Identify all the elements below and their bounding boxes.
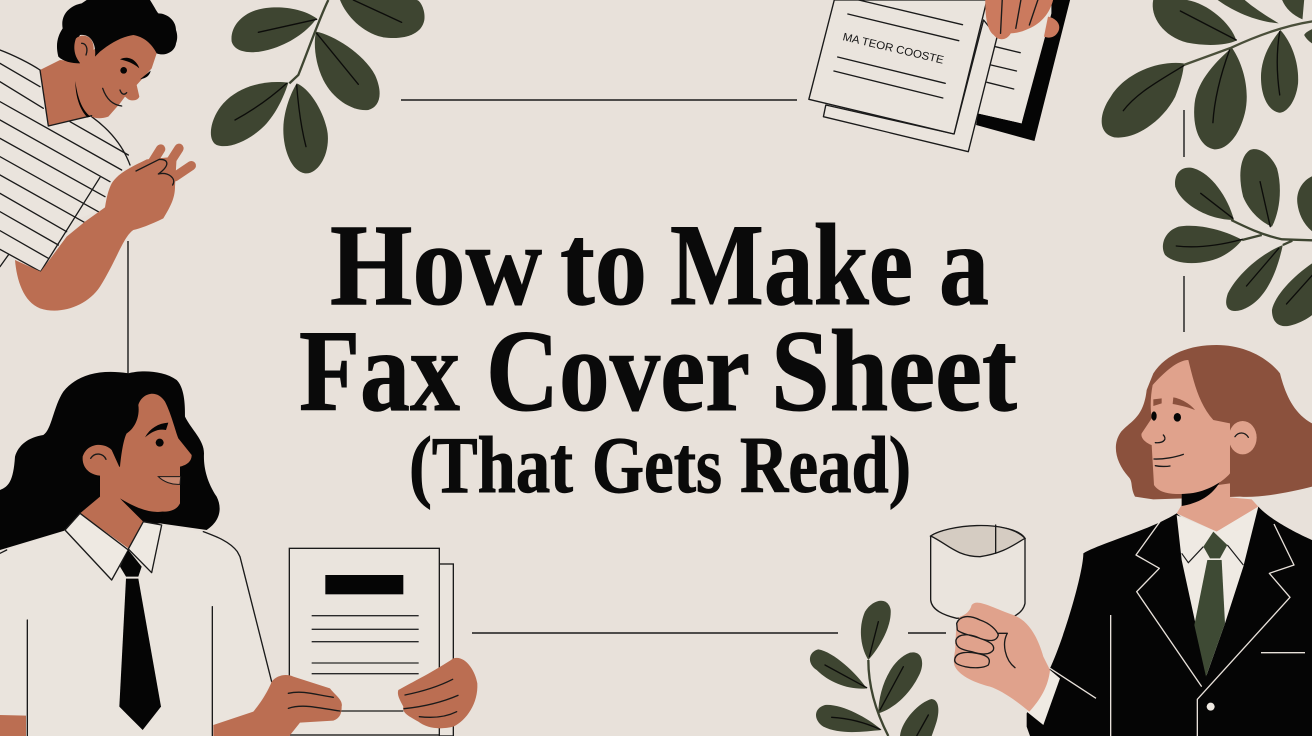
connector line top	[401, 99, 797, 101]
sheet label: MA TEOR COOSTE	[841, 31, 945, 67]
face	[1141, 360, 1230, 494]
head and neck	[40, 28, 157, 126]
cup	[931, 525, 1025, 618]
back sheet	[823, 20, 997, 152]
title: Gets	[592, 422, 722, 510]
figure: person in black suit holding cup	[931, 345, 1312, 736]
icon: leaf branch top right	[1102, 0, 1312, 149]
hair	[1116, 345, 1312, 499]
illustration: clipboard and papers	[809, 0, 1070, 152]
title	[299, 201, 1017, 510]
right hand	[398, 658, 477, 728]
title: a	[939, 201, 989, 330]
face details	[1151, 397, 1195, 466]
title: How	[330, 201, 542, 330]
title: Make	[670, 201, 913, 330]
hand holding sheets	[985, 0, 1059, 39]
connector line right lower	[1183, 276, 1185, 332]
title: Cover	[486, 307, 750, 436]
neck and face	[80, 394, 192, 548]
front sheet	[809, 0, 987, 134]
ear	[74, 36, 94, 63]
tie	[119, 550, 161, 730]
lapels and seams	[1050, 522, 1305, 736]
hair	[0, 371, 220, 550]
icon: leaf branch right middle	[1163, 149, 1312, 326]
face details	[75, 58, 151, 117]
figure: man in striped shirt	[0, 0, 191, 311]
collar	[65, 513, 128, 580]
icon: leaf branch top center	[211, 0, 425, 173]
title: Read)	[740, 422, 911, 510]
shirt	[1177, 507, 1258, 675]
cuff	[1027, 670, 1060, 725]
left hand	[213, 675, 342, 736]
document	[289, 548, 453, 736]
title: Sheet	[771, 307, 1017, 436]
connector line left vertical	[127, 241, 129, 374]
left forearm	[0, 715, 26, 736]
ear	[1229, 421, 1257, 454]
jacket	[1027, 507, 1312, 736]
face details	[145, 423, 181, 484]
connector line right upper	[1183, 110, 1185, 157]
shirt	[0, 513, 272, 736]
clipboard	[976, 0, 1070, 141]
connector line bottom	[472, 632, 838, 634]
striped shirt	[0, 50, 130, 272]
figure: woman with tie holding document	[0, 371, 477, 736]
ear	[83, 445, 120, 476]
tie	[1194, 532, 1227, 677]
title: (That	[409, 422, 573, 510]
neck	[1177, 483, 1258, 532]
arm and hand	[15, 148, 191, 311]
connector line short bottom	[908, 632, 946, 634]
hair	[57, 0, 177, 63]
hand holding cup	[954, 603, 1050, 712]
title: Fax	[299, 307, 460, 436]
icon: leaf sprig bottom center	[810, 601, 938, 736]
title: to	[560, 201, 647, 330]
